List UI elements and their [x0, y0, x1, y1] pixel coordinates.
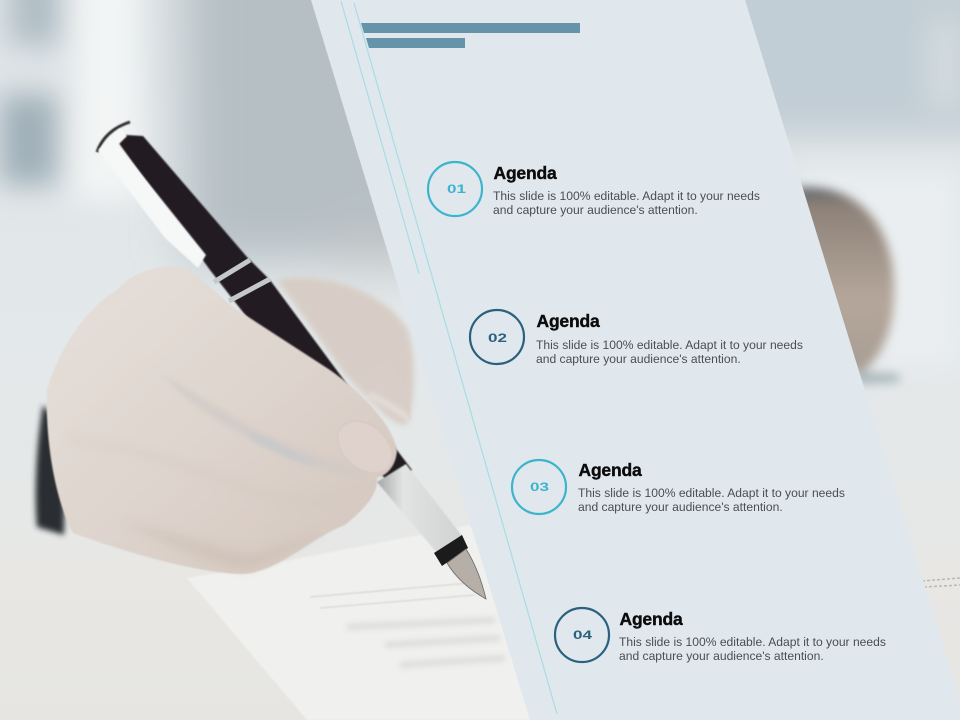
- description 01: This slide is 100% editable. Adapt it to your needs: [493, 189, 760, 203]
- blurred paper text: [347, 620, 505, 665]
- panel: slanted agenda background: [311, 0, 960, 720]
- agenda item 03: [512, 460, 845, 514]
- description 03: and capture your audience's attention.: [578, 500, 783, 514]
- index fingernail: [338, 421, 392, 473]
- description 02: and capture your audience's attention.: [536, 352, 741, 366]
- pen collar: [434, 535, 468, 566]
- pen rings: [214, 260, 270, 301]
- number badge 02: 02: [488, 331, 507, 345]
- title placeholder bar: [361, 23, 580, 33]
- pen barrel: [118, 135, 412, 484]
- number badge 04: 04: [573, 628, 592, 642]
- heading 01: Agenda: [494, 163, 557, 183]
- paper writing lines: [310, 583, 475, 608]
- subtitle placeholder bar: [366, 38, 465, 48]
- wrist at right: [790, 187, 900, 384]
- description 03: This slide is 100% editable. Adapt it to your needs: [578, 486, 845, 500]
- number badge 03: 03: [530, 480, 549, 494]
- paper: [187, 525, 560, 720]
- decorative slanted line left: [341, 1, 419, 274]
- heading 03: Agenda: [578, 460, 642, 480]
- top right blurred backdrop: [740, 0, 960, 135]
- pen grip: [377, 464, 463, 553]
- description 04: and capture your audience's attention.: [619, 649, 824, 663]
- agenda item 02: [470, 310, 803, 366]
- number badge 01: 01: [447, 182, 466, 196]
- heading 02: Agenda: [536, 311, 600, 331]
- thumb: [277, 277, 414, 425]
- number badge 03: [512, 460, 566, 514]
- pen clip: [98, 128, 206, 268]
- heading 04: Agenda: [620, 609, 683, 629]
- number badge 02: [470, 310, 524, 364]
- pen nib: [447, 549, 486, 599]
- number badge 04: [555, 608, 609, 662]
- description 02: This slide is 100% editable. Adapt it to your needs: [536, 338, 803, 352]
- agenda item 04: [555, 608, 886, 663]
- right paper text: [922, 578, 960, 587]
- decorative slanted line right: [354, 3, 557, 714]
- hand: [47, 267, 397, 574]
- description 01: and capture your audience's attention.: [493, 203, 698, 217]
- description 04: This slide is 100% editable. Adapt it to your needs: [619, 635, 886, 649]
- dark cuff: [36, 405, 66, 535]
- pen cap arc: [97, 122, 130, 152]
- thumbnail: [367, 365, 411, 420]
- agenda item 01: [428, 162, 760, 217]
- number badge 01: [428, 162, 482, 216]
